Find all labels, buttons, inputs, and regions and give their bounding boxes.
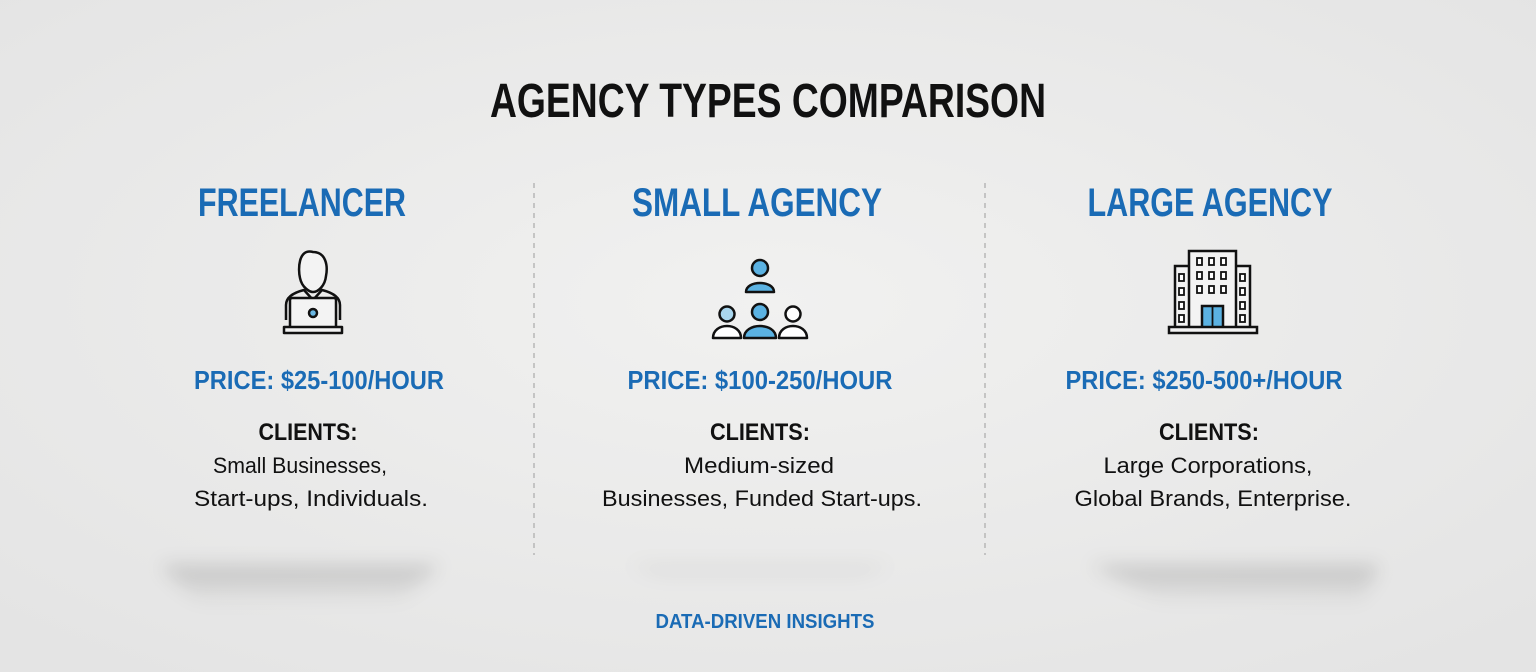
clients: Small Businesses, xyxy=(213,453,387,478)
price: PRICE: $250-500+/HOUR xyxy=(1066,365,1343,395)
clients xyxy=(602,419,922,511)
panel: freelancer xyxy=(194,181,444,511)
price: PRICE: $25-100/HOUR xyxy=(194,365,444,395)
clients: Businesses, Funded Start-ups. xyxy=(602,486,922,511)
heading: freelancer: FREELANCER xyxy=(198,181,406,225)
clients: Global Brands, Enterprise. xyxy=(1074,486,1352,511)
price: PRICE: $100-250/HOUR xyxy=(628,365,893,395)
icon: person with laptop xyxy=(284,252,342,333)
icon: building xyxy=(1169,251,1257,333)
heading: large agency: LARGE AGENCY xyxy=(1088,181,1333,225)
panel: large agency xyxy=(1066,181,1352,511)
panel shadows xyxy=(160,565,1380,605)
clients: CLIENTS: xyxy=(258,419,358,446)
clients: CLIENTS: xyxy=(710,419,810,446)
footer: DATA-DRIVEN INSIGHTS xyxy=(656,611,874,633)
heading: small agency: SMALL AGENCY xyxy=(632,181,882,225)
panel: small agency xyxy=(602,181,922,511)
clients: CLIENTS: xyxy=(1159,419,1259,446)
title: AGENCY TYPES COMPARISON xyxy=(490,75,1046,128)
icon: team xyxy=(713,260,807,338)
clients: Large Corporations, xyxy=(1104,453,1312,478)
clients xyxy=(1074,419,1352,511)
clients: Start-ups, Individuals. xyxy=(194,486,428,511)
clients xyxy=(194,419,428,511)
clients: Medium-sized xyxy=(684,453,834,478)
